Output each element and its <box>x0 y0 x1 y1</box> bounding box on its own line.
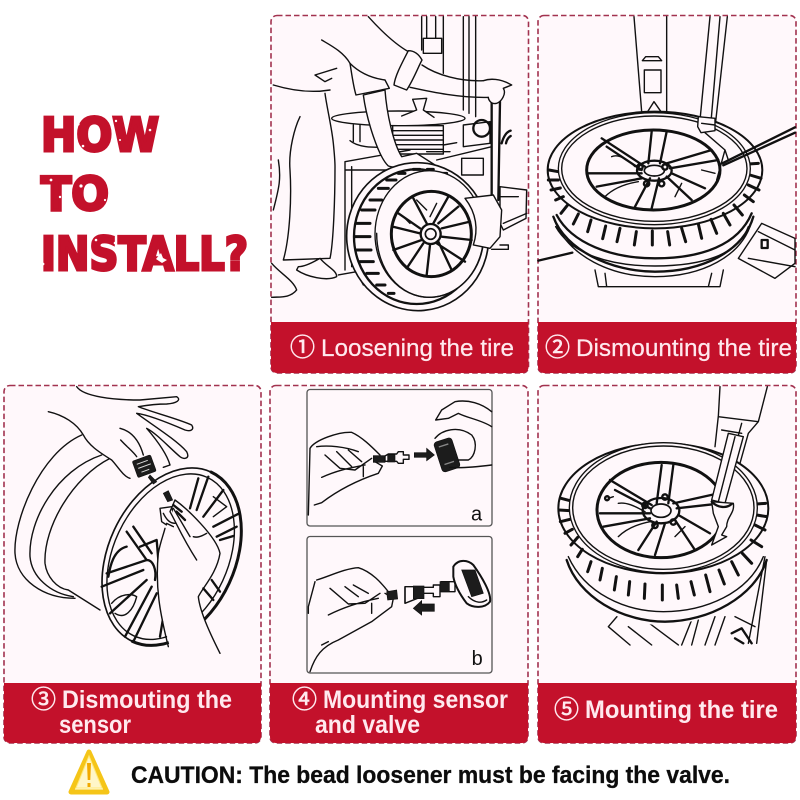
illustration: sensor and valve assembly <box>308 561 490 672</box>
caption banner <box>270 683 528 743</box>
illustration: hands removing sensor from rim <box>15 387 269 668</box>
tire <box>558 442 768 625</box>
sub-panel b <box>307 536 492 673</box>
mounting tool <box>698 117 715 133</box>
illustration: valve into sensor <box>308 401 492 526</box>
panel: step 3 dismouting the sensor <box>4 386 269 743</box>
lower hand <box>157 500 220 653</box>
illustration: tire being mounted <box>558 387 768 645</box>
wheel <box>340 157 495 317</box>
bead loosener <box>465 195 502 248</box>
caption banner <box>4 683 261 743</box>
caption banner <box>538 683 796 743</box>
title: how to install <box>41 108 248 281</box>
tire <box>548 113 762 278</box>
caption banner: Dismounting the tire <box>576 335 792 362</box>
caption banner: sensor <box>59 711 131 739</box>
caption banner: ⑤ <box>554 696 579 724</box>
caption banner <box>271 322 528 373</box>
icon: warning triangle <box>71 752 107 792</box>
sub-panel a <box>307 390 492 526</box>
title: how to install: HOW <box>41 108 159 162</box>
caption banner: ④ <box>292 686 317 714</box>
title: how to install: INSTALL? <box>41 227 248 281</box>
panel: step 5 mounting the tire <box>538 386 796 743</box>
caption banner: Mounting the tire <box>585 696 778 724</box>
panel: step 4 mounting sensor and valve <box>270 386 528 743</box>
caption banner: Loosening the tire <box>321 335 514 362</box>
illustration: sensor and valve assembly: b <box>472 648 483 670</box>
illustration: technician at tire changer <box>272 17 527 317</box>
illustration: tire with lever on machine <box>538 17 795 287</box>
caption banner: Mounting sensor <box>323 686 508 714</box>
caption banner: ① <box>290 334 315 362</box>
caption banner <box>538 322 796 373</box>
sensor <box>132 455 156 478</box>
person <box>322 17 408 63</box>
caution text: CAUTION: The bead loosener must be facing the valve. <box>131 762 730 789</box>
caution note <box>71 752 730 792</box>
caption banner: and valve <box>315 711 420 739</box>
title: how to install: TO <box>41 167 109 221</box>
panel: step 1 loosening the tire <box>271 16 528 373</box>
mounting tool <box>712 433 743 503</box>
caption banner: Dismouting the <box>62 686 232 714</box>
illustration: valve into sensor: a <box>471 504 483 526</box>
panel: step 2 dismounting the tire <box>538 16 796 373</box>
caption banner: ② <box>545 334 570 362</box>
upper hand <box>48 412 182 478</box>
caption banner: ③ <box>31 686 56 714</box>
